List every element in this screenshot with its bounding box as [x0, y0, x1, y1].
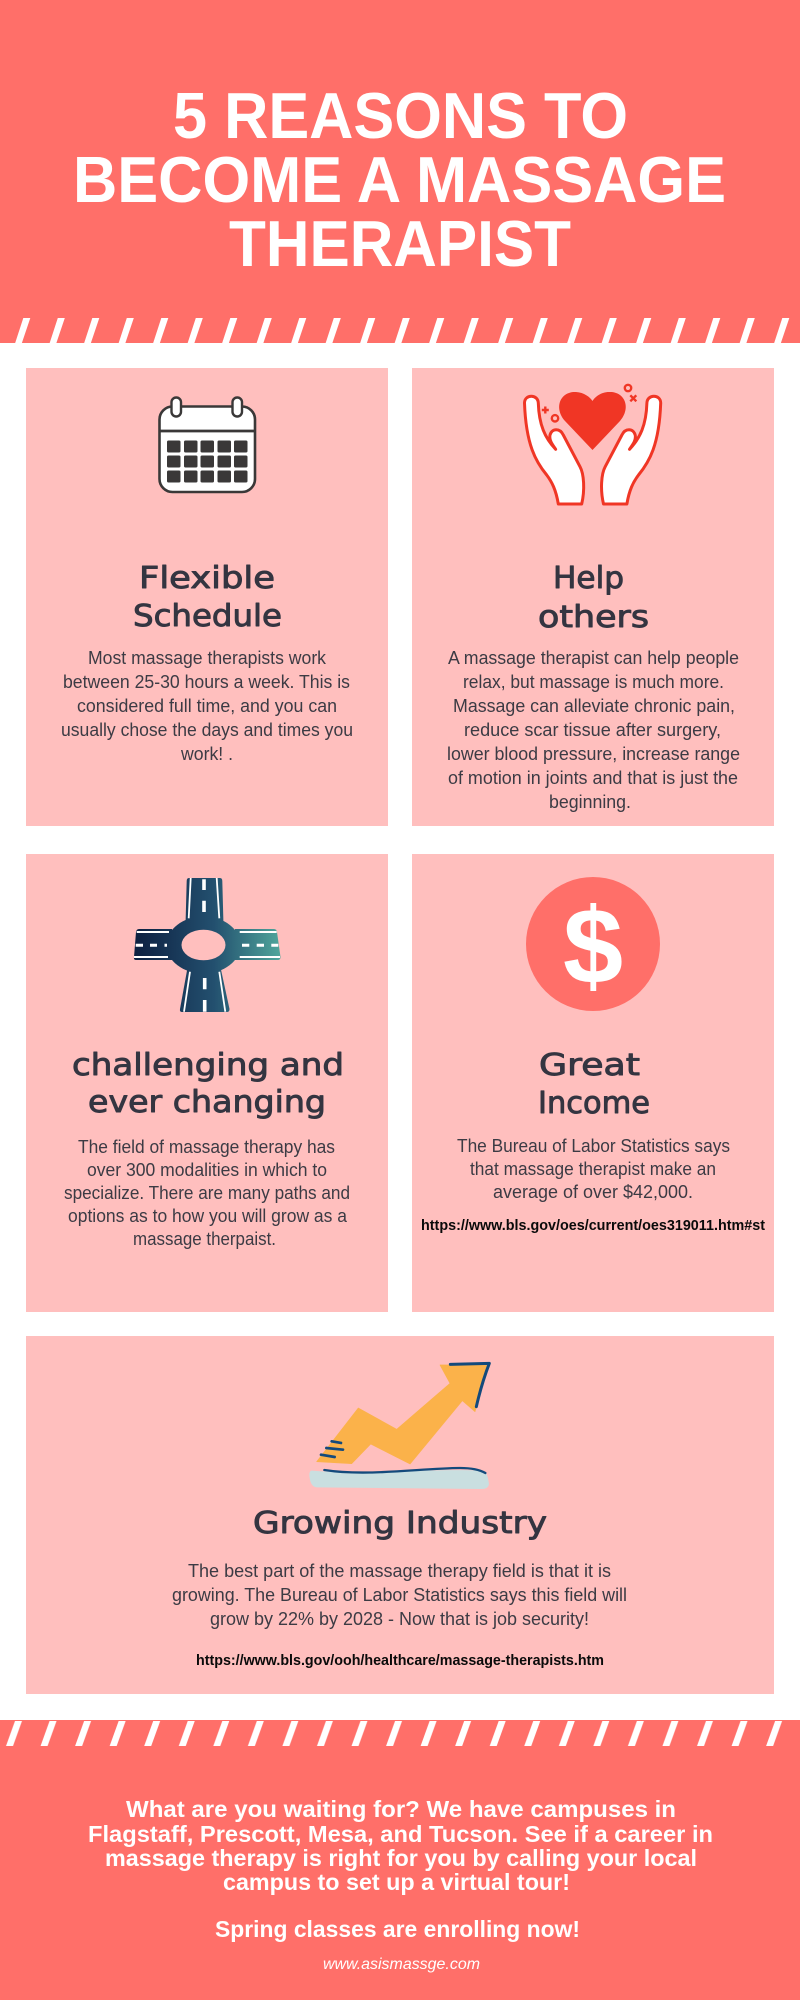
body text: flexible schedule: between 25-30 hours a week. This is	[63, 672, 350, 692]
heading: flexible schedule: Flexible	[139, 561, 275, 596]
panel: flexible schedule	[26, 368, 388, 826]
body text: flexible schedule	[61, 648, 353, 764]
icon: roundabout road	[134, 878, 280, 1012]
panel: challenging and ever changing	[26, 854, 388, 1312]
source link: bls outlook: https://www.bls.gov/ooh/healthcare/massage-therapists.htm	[196, 1652, 604, 1669]
heading: great income: Income	[538, 1086, 650, 1121]
heading: challenging and ever changing: ever changing	[88, 1085, 326, 1120]
heading: great income: Great	[539, 1048, 640, 1083]
body text: growing industry: grow by 22% by 2028 - Now that is job security!	[210, 1609, 589, 1629]
footer band	[0, 1720, 800, 2000]
heading: great income	[538, 1048, 650, 1121]
body text: challenging and ever changing	[64, 1137, 350, 1249]
heading: challenging and ever changing	[72, 1048, 344, 1120]
body text: challenging and ever changing: massage therpaist.	[133, 1229, 276, 1249]
heading: challenging and ever changing: challenging and	[72, 1048, 344, 1083]
body text: challenging and ever changing: The field of massage therapy has	[78, 1137, 335, 1157]
panel: growing industry	[26, 1336, 774, 1694]
title: 5 REASONS TO	[173, 79, 628, 152]
body text: challenging and ever changing: options as to how you will grow as a	[68, 1206, 348, 1226]
icon: dollar coin: $	[563, 885, 623, 1006]
body text: help others: of motion in joints and that is just the	[448, 768, 738, 788]
source link: bls wages: https://www.bls.gov/oes/current/oes319011.htm#st	[421, 1217, 765, 1234]
body text: flexible schedule: usually chose the days and times you	[61, 720, 353, 740]
body text: help others: A massage therapist can help people	[448, 648, 739, 668]
heading: flexible schedule	[133, 561, 282, 634]
body text: growing industry: growing. The Bureau of Labor Statistics says this field will	[172, 1585, 627, 1605]
body text: help others: lower blood pressure, increase range	[447, 744, 740, 764]
body text: help others: reduce scar tissue after surgery,	[464, 720, 721, 740]
body text: great income: that massage therapist make an	[470, 1159, 716, 1179]
body text: growing industry: The best part of the massage therapy field is that it is	[188, 1561, 611, 1581]
icon: calendar	[160, 398, 255, 492]
heading: growing industry: Growing Industry	[253, 1506, 547, 1541]
call to action text	[88, 1796, 713, 1895]
body text: great income: average of over $42,000.	[493, 1182, 693, 1202]
body text: help others	[447, 648, 740, 812]
heading: flexible schedule: Schedule	[133, 599, 282, 634]
call to action text: massage therapy is right for you by calling your local	[105, 1845, 697, 1871]
body text: flexible schedule: Most massage therapists work	[88, 648, 327, 668]
icon: hands holding heart	[524, 385, 661, 504]
body text: challenging and ever changing: over 300 modalities in which to	[87, 1160, 327, 1180]
body text: great income	[457, 1136, 730, 1202]
heading: help others: Help	[553, 561, 624, 596]
enrollment note: Spring classes are enrolling now!	[215, 1916, 580, 1942]
heading: help others	[538, 561, 649, 635]
body text: growing industry	[172, 1561, 627, 1629]
icon: dollar coin	[526, 877, 660, 1011]
website: www.asismassge.com	[323, 1956, 480, 1973]
title: THERAPIST	[229, 207, 571, 280]
panel: help others	[412, 368, 774, 826]
title: BECOME A MASSAGE	[73, 143, 726, 216]
body text: help others: beginning.	[549, 792, 631, 812]
header band	[0, 0, 800, 344]
body text: flexible schedule: considered full time, and you can	[77, 696, 337, 716]
title	[73, 79, 726, 280]
heading: help others: others	[538, 600, 649, 635]
body text: great income: The Bureau of Labor Statistics says	[457, 1136, 730, 1156]
body text: flexible schedule: work! .	[180, 744, 233, 764]
call to action text: Flagstaff, Prescott, Mesa, and Tucson. See if a career in	[88, 1821, 713, 1847]
body text: help others: relax, but massage is much more.	[463, 672, 724, 692]
body text: challenging and ever changing: specialize. There are many paths and	[64, 1183, 350, 1203]
call to action text: campus to set up a virtual tour!	[223, 1869, 570, 1895]
body text: help others: Massage can alleviate chronic pain,	[453, 696, 735, 716]
call to action text: What are you waiting for? We have campuses in	[126, 1796, 676, 1822]
icon: rising arrow	[309, 1363, 489, 1489]
panel: great income	[412, 854, 774, 1312]
